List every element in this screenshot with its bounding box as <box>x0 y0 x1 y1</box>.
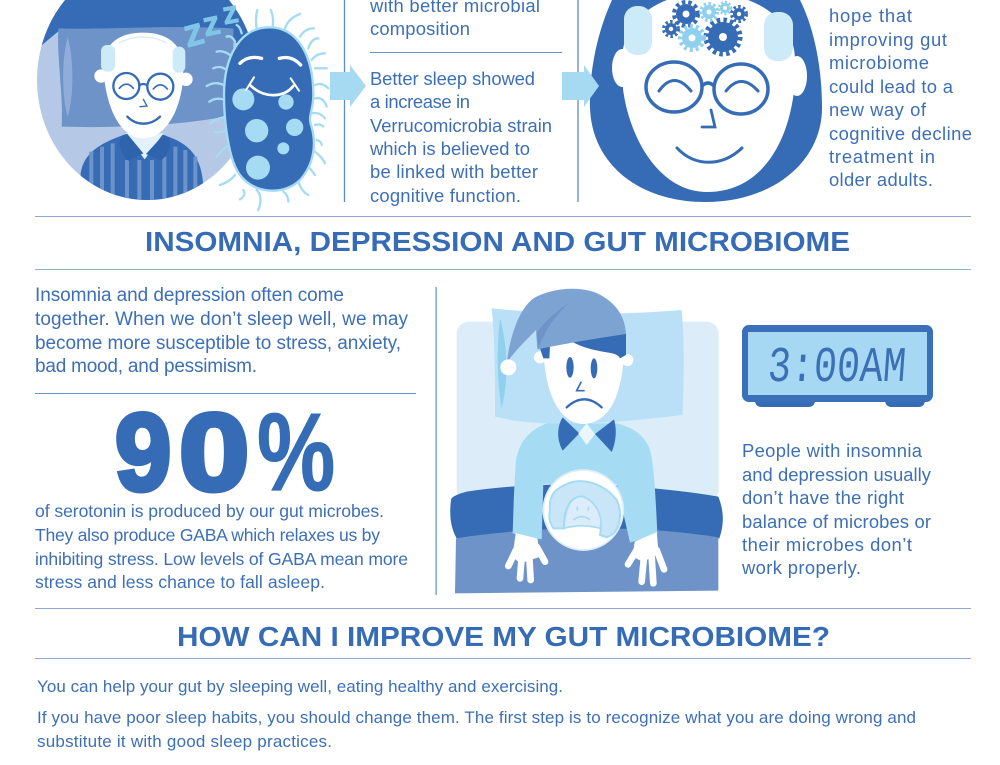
icon: alarm clock 3:00AM <box>742 325 933 407</box>
text: insomnia and depression intro: together. When we don’t sleep well, we may <box>35 309 408 330</box>
text: improvement advice: You can help your gut by sleeping well, eating healthy and exercising. <box>37 677 563 696</box>
icon: alarm clock 3:00AM: 3:00AM <box>766 340 908 397</box>
divider <box>35 658 971 659</box>
icon: Zzz letters: Z <box>201 11 222 42</box>
text: Verrucomicrobia explanation: be linked with better <box>370 161 538 182</box>
hands <box>508 532 664 583</box>
nightcap <box>507 289 626 363</box>
collar <box>558 417 579 451</box>
text: improvement advice: substitute it with good sleep practices. <box>37 732 332 751</box>
text: serotonin and GABA <box>35 501 408 592</box>
text: Verrucomicrobia explanation: which is believed to <box>369 138 530 159</box>
illustration: sleeping older man in circle <box>37 0 248 200</box>
text: Verrucomicrobia explanation: a increase in <box>370 91 470 112</box>
text: hope for cognitive decline treatment: improving gut <box>829 29 947 50</box>
text: hope for cognitive decline treatment: could lead to a <box>829 76 954 97</box>
text: insomnia and depression intro: become more susceptible to stress, anxiety, <box>35 333 401 354</box>
text: hope for cognitive decline treatment: microbiome <box>829 52 929 73</box>
divider <box>35 269 971 270</box>
illustration: sad man in bed <box>450 289 723 593</box>
divider <box>35 216 971 217</box>
text: hope for cognitive decline treatment: new way of <box>829 99 927 120</box>
divider <box>370 52 562 53</box>
icon: Zzz letters: Z <box>221 1 240 29</box>
text: insomnia and depression intro <box>35 285 408 377</box>
divider <box>35 608 971 609</box>
text: serotonin and GABA: stress and less chance to fall asleep. <box>35 572 325 592</box>
icon: gears <box>664 2 746 54</box>
icon: Zzz letters: Z <box>182 18 207 54</box>
icon: happy gut bacterium <box>207 10 328 210</box>
text: microbe balance: work properly. <box>741 557 861 578</box>
text: microbial composition <box>369 0 540 39</box>
text: hope for cognitive decline treatment: hope that <box>829 5 912 26</box>
arrow: text column to head <box>562 65 599 107</box>
divider <box>35 393 416 394</box>
text: improvement advice <box>37 677 916 751</box>
stat: 90%: 9 <box>115 391 171 514</box>
text: microbe balance: their microbes don’t <box>742 534 912 555</box>
divider: column lines, top row <box>344 0 578 202</box>
icon: Zzz letters <box>182 1 240 54</box>
text: Verrucomicrobia explanation <box>369 68 552 206</box>
text: Verrucomicrobia explanation: Better sleep showed <box>370 68 535 89</box>
text: hope for cognitive decline treatment: older adults. <box>829 169 933 190</box>
gut circle <box>543 470 623 550</box>
shirt <box>513 423 657 543</box>
blanket <box>450 485 723 538</box>
text: Verrucomicrobia explanation: Verrucomicrobia strain <box>370 115 552 136</box>
stat: 90%: % <box>257 392 335 514</box>
text: hope for cognitive decline treatment <box>829 5 972 190</box>
face <box>566 357 574 378</box>
text: insomnia and depression intro: bad mood, and pessimism. <box>35 356 257 377</box>
text: hope for cognitive decline treatment: cognitive decline <box>829 123 972 144</box>
text: microbe balance <box>741 440 932 578</box>
stat: 90% <box>115 391 335 514</box>
head <box>534 351 546 363</box>
text: serotonin and GABA: of serotonin is produced by our gut microbes. <box>35 501 384 521</box>
text: microbe balance: don’t have the right <box>742 487 904 508</box>
text: insomnia and depression intro: Insomnia and depression often come <box>35 285 344 306</box>
divider: vertical <box>436 287 437 595</box>
text: serotonin and GABA: They also produce GABA which relaxes us by <box>35 525 380 545</box>
text: Verrucomicrobia explanation: cognitive function. <box>370 185 521 206</box>
text: microbe balance: People with insomnia <box>742 440 923 461</box>
text: hope for cognitive decline treatment: treatment in <box>829 146 935 167</box>
text: microbe balance: balance of microbes or <box>742 511 931 532</box>
heading: insomnia section: INSOMNIA, DEPRESSION AND GUT MICROBIOME <box>145 226 850 257</box>
heading: improve gut microbiome: HOW CAN I IMPROVE MY GUT MICROBIOME? <box>177 621 830 652</box>
illustration: smiling head with gears <box>590 0 822 202</box>
stat: 90%: 0 <box>179 392 249 514</box>
text: improvement advice: If you have poor sleep habits, you should change them. The first step is to recognize what you are doing wrong and <box>37 708 916 727</box>
text: microbe balance: and depression usually <box>742 464 932 485</box>
headboard <box>457 322 719 502</box>
pillow <box>492 308 684 424</box>
arrow: man to text column <box>330 65 366 107</box>
text: microbial composition: composition <box>370 18 470 39</box>
text: serotonin and GABA: inhibiting stress. Low levels of GABA mean more <box>35 549 408 569</box>
